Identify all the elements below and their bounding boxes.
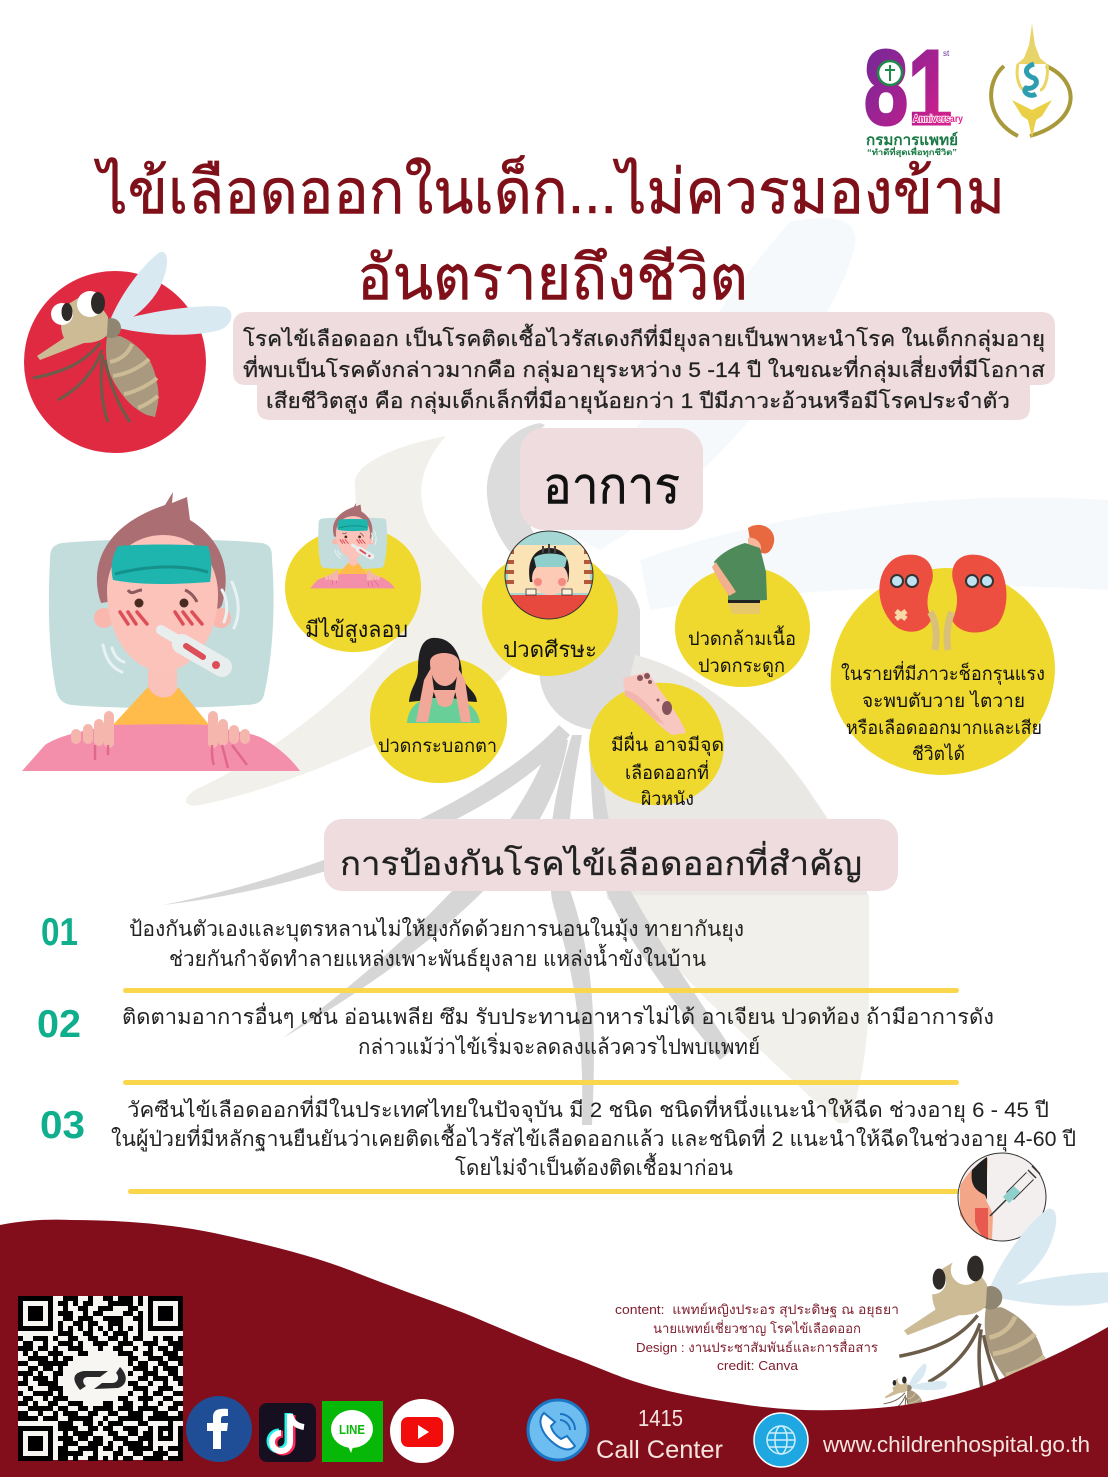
icon: phone — [528, 1400, 588, 1460]
icon: tiktok — [259, 1403, 316, 1462]
prevention item 01: ช่วยกันกำจัดทำลายแหล่งเพาะพันธ์ยุงลาย แหล่งน้ำขังในบ้าน — [169, 944, 706, 972]
symptom: high fever: มีไข้สูงลอบ — [305, 617, 408, 643]
heading: prevention: การป้องกันโรคไข้เลือดออกที่สำคัญ — [340, 841, 862, 882]
background mosquito watermark — [163, 218, 1108, 1125]
credits: Design : งานประชาสัมพันธ์และการสื่อสาร — [636, 1339, 878, 1355]
icon: globe — [754, 1413, 808, 1467]
prevention item 03: 03 — [40, 1104, 85, 1147]
intro panel: โรคไข้เลือดออก เป็นโรคติดเชื้อไวรัสเดงกีที่มียุงลายเป็นพาหะนำโรค ในเด็กกลุ่มอายุ — [243, 324, 1045, 352]
call center text: 1415 — [638, 1405, 683, 1431]
logo: 81st anniversary: “ทำดีที่สุดเพื่อทุกชีวิต” — [867, 146, 957, 158]
credits: content: แพทย์หญิงประอร สุประดิษฐ ณ อยุธยา — [615, 1302, 899, 1318]
illustration: large mosquito footer — [899, 1209, 1108, 1408]
symptom: rash: ผิวหนัง — [641, 788, 694, 809]
illustration: small mosquito footer — [884, 1364, 947, 1418]
credits — [615, 1302, 899, 1373]
website url: www.childrenhospital.go.th — [822, 1432, 1090, 1457]
symptom: headache: ปวดศีรษะ — [503, 637, 597, 662]
prevention item 01: ป้องกันตัวเองและบุตรหลานไม่ให้ยุงกัดด้วยการนอนในมุ้ง ทายากันยุง — [129, 917, 744, 942]
symptom: muscle and bone pain: ปวดกล้ามเนื้อ — [688, 625, 796, 649]
symptom: kidney failure — [831, 555, 1055, 775]
call center text — [596, 1405, 723, 1464]
symptom: kidney failure: หรือเลือดออกมากและเสีย — [846, 717, 1042, 738]
symptom: eye pain — [370, 638, 507, 783]
prevention item 03: ในผู้ป่วยที่มีหลักฐานยืนยันว่าเคยติดเชื้อไวรัสไข้เลือดออกแล้ว และชนิดที่ 2 แนะนำให้ฉีดในช่วงอายุ 4-60 ปี — [111, 1124, 1076, 1152]
icon: mosquito on red circle — [24, 252, 231, 453]
symptom: muscle and bone pain — [675, 525, 810, 687]
symptom: rash: เลือดออกที่ — [625, 760, 709, 783]
icon: line: LINE — [339, 1422, 365, 1437]
heading: symptoms: อาการ — [543, 458, 680, 514]
prevention item 03: วัคซีนไข้เลือดออกที่มีในประเทศไทยในปัจจุบัน มี 2 ชนิด ชนิดที่หนึ่งแนะนำให้ฉีด ช่วงอายุ 6 - 45 ปี — [127, 1095, 1049, 1123]
prevention item 01 — [41, 911, 744, 972]
prevention item 02: ติดตามอาการอื่นๆ เช่น อ่อนเพลีย ซึม รับประทานอาหารไม่ได้ อาเจียน ปวดท้อง ถ้ามีอาการดัง — [122, 1002, 994, 1029]
symptom: eye pain: ปวดกระบอกตา — [378, 735, 497, 756]
logo: royal seal — [991, 24, 1071, 138]
logo: 81st anniversary: 81 — [864, 29, 952, 147]
logo: 81st anniversary: กรมการแพทย์ — [866, 131, 958, 149]
symptom: kidney failure: ชีวิตได้ — [912, 743, 965, 764]
illustration: sick boy large — [22, 492, 300, 771]
symptom: muscle and bone pain: ปวดกระดูก — [698, 655, 785, 677]
logo: 81st anniversary: st — [943, 49, 950, 58]
intro panel: เสียชีวิตสูง คือ กลุ่มเด็กเล็กที่มีอายุน้อยกว่า 1 ปีมีภาวะอ้วนหรือมีโรคประจำตัว — [266, 386, 1010, 414]
footer wave — [0, 1220, 1108, 1477]
prevention item 02 — [37, 1002, 994, 1059]
symptom: kidney failure: ในรายที่มีภาวะช็อกรุนแรง — [841, 661, 1045, 686]
symptom: rash: มีผื่น อาจมีจุด — [611, 732, 724, 757]
title — [93, 155, 1005, 313]
intro panel — [233, 312, 1055, 420]
symptom: headache — [482, 531, 618, 676]
symptom: high fever — [285, 503, 421, 652]
heading: prevention — [324, 819, 898, 891]
prevention item 02: 02 — [37, 1003, 81, 1046]
title: อันตรายถึงชีวิต — [357, 244, 748, 313]
prevention item 01: 01 — [41, 911, 78, 954]
credits: นายแพทย์เชี่ยวชาญ โรคไข้เลือดออก — [653, 1320, 861, 1336]
icon: line — [322, 1401, 383, 1462]
prevention item 02: กล่าวแม้ว่าไข้เริ่มจะลดลงแล้วควรไปพบแพทย์ — [358, 1032, 760, 1059]
symptom: kidney failure: จะพบตับวาย ไตวาย — [862, 690, 1025, 711]
icon: facebook — [186, 1396, 252, 1462]
intro panel: ที่พบเป็นโรคดังกล่าวมากคือ กลุ่มอายุระหว่าง 5 -14 ปี ในขณะที่กลุ่มเสี่ยงที่มีโอกาส — [243, 355, 1045, 383]
icon: vaccination syringe — [958, 1153, 1046, 1241]
prevention item 03 — [40, 1095, 1076, 1180]
heading: symptoms — [520, 428, 703, 530]
title: ไข้เลือดออกในเด็ก...ไม่ควรมองข้าม — [93, 155, 1005, 227]
prevention item 03: โดยไม่จำเป็นต้องติดเชื้อมาก่อน — [455, 1153, 733, 1180]
call center text: Call Center — [596, 1436, 723, 1464]
symptom: rash — [589, 672, 724, 809]
QR code — [18, 1296, 183, 1460]
logo: 81st anniversary: Anniversary — [913, 114, 963, 125]
credits: credit: Canva — [717, 1358, 799, 1373]
icon: youtube — [390, 1399, 454, 1463]
